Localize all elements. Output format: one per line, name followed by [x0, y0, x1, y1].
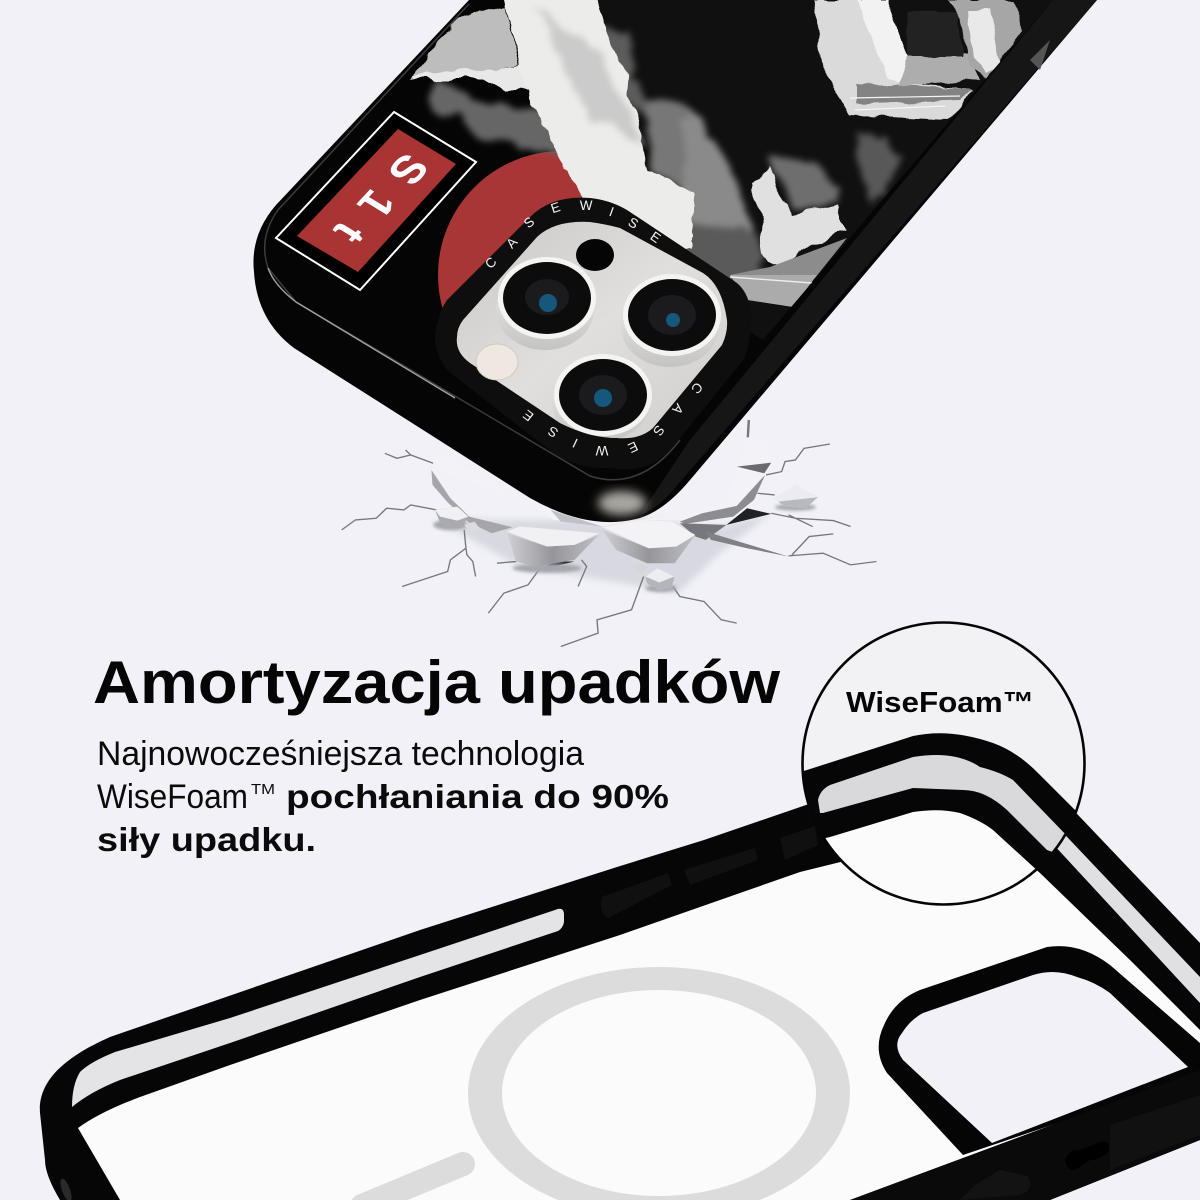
- brand label: [276, 112, 476, 290]
- magsafe alignment pill: [362, 1164, 463, 1200]
- brand ring text: CASEWISE: [482, 198, 664, 272]
- watercolor artwork: [408, 0, 1053, 340]
- black frame: [40, 757, 1200, 1200]
- description text: WiseFoam: [97, 778, 248, 816]
- upper plates: [431, 437, 771, 540]
- top phone with case: [253, 0, 1097, 522]
- magnifier label: WiseFoam™: [846, 687, 1034, 719]
- streak texture: [533, 7, 644, 148]
- lens 2: [621, 274, 721, 367]
- top left light area: [408, 0, 843, 267]
- red sun: [438, 151, 686, 399]
- camera cutout: [879, 946, 1200, 1155]
- description text: [97, 735, 669, 858]
- top mountain: [813, 0, 1023, 120]
- left foam slot: [72, 909, 564, 1107]
- magnifier fill: [802, 622, 1085, 905]
- description text: siły upadku.: [97, 821, 316, 858]
- lower edge band: [850, 1070, 1200, 1200]
- side buttons: [601, 826, 818, 918]
- bumper inner highlight: [268, 268, 455, 398]
- right bumper: [640, 0, 1097, 515]
- left bumper rim line: [265, 4, 680, 480]
- description text: Najnowocześniejsza technologia: [97, 735, 584, 773]
- magnifier outline: [802, 622, 1084, 904]
- description text: TM: [251, 781, 275, 798]
- chunks: [433, 485, 818, 592]
- camera island: CASEWISE: [520, 379, 706, 458]
- white main streak: [500, 0, 690, 250]
- side button highlight: [1030, 40, 1050, 70]
- crack wedges: [540, 508, 788, 570]
- corner port: [58, 1177, 74, 1200]
- magsafe ring: [468, 967, 850, 1200]
- crack lines: [342, 420, 876, 646]
- heading: Amortyzacja upadków: [93, 649, 780, 716]
- soft ink washes: [425, 20, 905, 285]
- brand label: S1t: [310, 146, 439, 265]
- dark base wash: [590, 0, 1053, 340]
- corner highlight: [598, 491, 646, 515]
- clear case frame: [40, 757, 1200, 1200]
- case body: [253, 0, 1097, 522]
- lens 1: [496, 257, 596, 350]
- ground shadow: [437, 513, 771, 593]
- WiseFoam magnifier callout: [801, 621, 1086, 906]
- lens 3: [552, 354, 652, 441]
- microphone hole: [576, 239, 614, 271]
- right foam slot: [990, 780, 1200, 1003]
- clear back panel: [78, 834, 1200, 1200]
- lower gray stripe: [730, 238, 847, 278]
- description text: pochłaniania do 90%: [286, 778, 669, 815]
- cracked ground impact: [342, 420, 876, 646]
- magnified frame: [804, 733, 1076, 903]
- right white wash: [753, 167, 843, 267]
- flash: [476, 344, 518, 380]
- camera island: [435, 198, 751, 469]
